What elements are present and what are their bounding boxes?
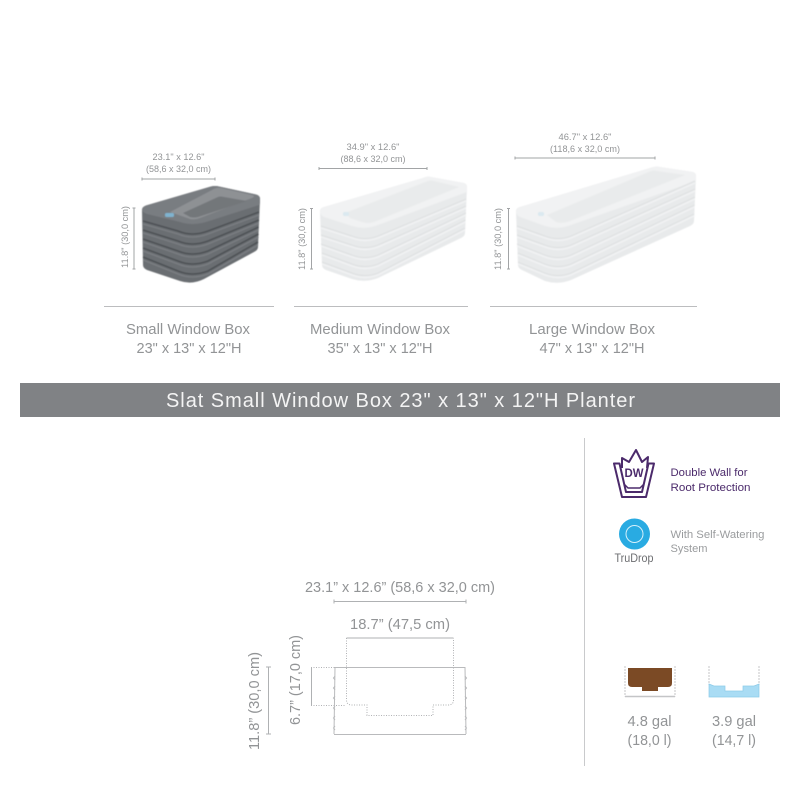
planter: medium white <box>320 177 467 281</box>
text: double wall: Root Protection <box>670 482 750 494</box>
feature: soil capacity <box>625 666 675 749</box>
dimension: medium height: 11.8" (30,0 cm) <box>297 208 307 270</box>
icon: double wall leaf pot: DW <box>624 466 644 480</box>
dimension: small top <box>142 152 215 180</box>
dimension: outer width: 23.1” x 12.6” (58,6 x 32,0 cm) <box>305 580 495 596</box>
dimension: medium top <box>319 142 427 170</box>
title banner <box>20 383 780 417</box>
label: small window box: 23" x 13" x 12"H <box>136 341 242 357</box>
feature: water capacity <box>709 666 759 749</box>
text: self-watering: With Self-Watering <box>670 529 764 541</box>
label: small window box: Small Window Box <box>126 322 251 338</box>
dimension: large top <box>515 132 655 160</box>
label: small window box <box>126 322 251 357</box>
dimension: medium top: 34.9" x 12.6" <box>346 142 400 152</box>
dimension: medium top: (88,6 x 32,0 cm) <box>340 154 406 164</box>
label: medium window box <box>310 322 451 357</box>
text: water capacity: (14,7 l) <box>712 733 756 749</box>
panel: large window box <box>490 132 697 357</box>
text: soil capacity: (18,0 l) <box>628 733 672 749</box>
dimension: medium height <box>297 208 313 270</box>
label: large window box <box>529 322 656 357</box>
slat notches <box>334 676 466 730</box>
dimension: outer height: 11.8” (30,0 cm) <box>247 652 263 750</box>
dimension: large top: (118,6 x 32,0 cm) <box>550 144 620 154</box>
label: large window box: 47" x 13" x 12"H <box>540 341 644 357</box>
feature: double wall <box>614 450 750 497</box>
diagram: planter cross-section <box>247 580 495 750</box>
text: self-watering: System <box>670 543 708 555</box>
label: large window box: Large Window Box <box>529 322 656 338</box>
icon: water reservoir <box>709 666 759 697</box>
title banner: Slat Small Window Box 23" x 13" x 12"H Planter <box>166 390 635 412</box>
divider: large <box>490 306 697 307</box>
dimension: large height: 11.8" (30,0 cm) <box>493 208 503 270</box>
planter outline <box>334 667 466 734</box>
text: water capacity: 3.9 gal <box>712 714 756 730</box>
dimension: inner height: 6.7” (17,0 cm) <box>288 635 304 725</box>
panel: small window box <box>104 152 274 357</box>
dimension: small height <box>120 206 136 269</box>
feature: trudrop <box>614 518 764 565</box>
icon: soil volume <box>625 666 675 696</box>
dimension: large height <box>493 208 510 270</box>
inner profile dotted <box>346 638 454 716</box>
dimension: outer height <box>247 652 271 750</box>
dimension: small height: 11.8" (30,0 cm) <box>120 206 130 268</box>
dimension: inner height <box>288 635 312 725</box>
dimension: large top: 46.7" x 12.6" <box>558 132 612 142</box>
divider: small <box>104 306 274 307</box>
planter: large white <box>516 167 696 283</box>
dimension: inner width: 18.7” (47,5 cm) <box>350 617 450 633</box>
dimension: outer width <box>305 580 495 604</box>
planter: small charcoal <box>142 186 260 283</box>
label: medium window box: 35" x 13" x 12"H <box>328 341 432 357</box>
icon: trudrop <box>614 518 654 565</box>
dimension: small top: 23.1" x 12.6" <box>152 152 204 162</box>
icon: trudrop: TruDrop <box>614 553 654 565</box>
vertical divider <box>584 438 585 766</box>
panel: medium window box <box>294 142 468 357</box>
dotted guides <box>311 668 346 706</box>
dimension: small top: (58,6 x 32,0 cm) <box>146 164 211 174</box>
label: medium window box: Medium Window Box <box>310 322 451 338</box>
text: soil capacity: 4.8 gal <box>628 714 672 730</box>
text: double wall: Double Wall for <box>670 467 748 479</box>
divider: medium <box>294 306 468 307</box>
